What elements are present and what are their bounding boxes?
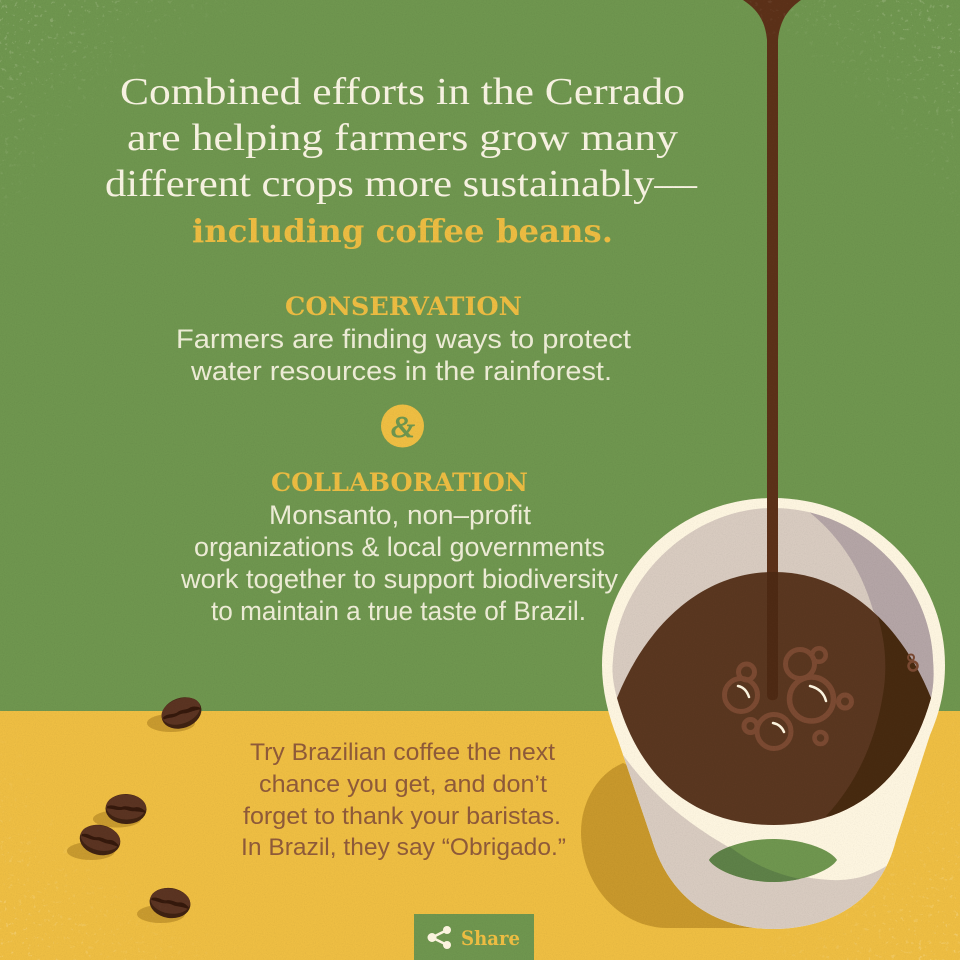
share button: Share bbox=[461, 926, 520, 950]
closing message bbox=[241, 739, 566, 861]
cup shadow on table bbox=[581, 763, 762, 928]
collaboration block: to maintain a true taste of Brazil. bbox=[211, 596, 586, 626]
closing message: forget to thank your baristas. bbox=[243, 803, 561, 830]
background: green wall bbox=[0, 0, 960, 711]
title: are helping farmers grow many bbox=[127, 117, 678, 159]
conservation block: Farmers are finding ways to protect bbox=[176, 324, 632, 354]
stream shading over coffee bbox=[767, 572, 778, 700]
conservation block: CONSERVATION bbox=[285, 292, 522, 321]
collaboration block: organizations & local governments bbox=[194, 532, 605, 562]
collaboration block: COLLABORATION bbox=[271, 468, 528, 497]
coffee surface bbox=[617, 572, 931, 825]
cup inner shadow bbox=[810, 512, 934, 702]
coffee beans bbox=[67, 692, 206, 923]
collaboration block: Monsanto, non–profit bbox=[269, 500, 532, 530]
background: yellow table bbox=[0, 711, 960, 960]
bubble highlights bbox=[738, 686, 826, 732]
title bbox=[105, 71, 698, 250]
ampersand badge: & bbox=[390, 409, 415, 444]
share button bbox=[414, 914, 534, 960]
title: Combined efforts in the Cerrado bbox=[120, 71, 685, 113]
coffee bubbles bbox=[724, 648, 918, 748]
ampersand badge bbox=[381, 404, 424, 448]
coffee stream bbox=[743, 0, 801, 700]
cup inner wall bbox=[612, 508, 934, 825]
green saucer reflection bbox=[709, 839, 837, 882]
closing message: In Brazil, they say “Obrigado.” bbox=[241, 834, 566, 861]
icon: share bbox=[428, 926, 451, 949]
coffee shadow bbox=[826, 616, 931, 816]
cup body and rim bbox=[602, 498, 945, 929]
collaboration block: work together to support biodiversity bbox=[180, 564, 618, 594]
conservation block bbox=[176, 292, 632, 386]
cup outer shaded side bbox=[623, 755, 887, 929]
closing message: chance you get, and don’t bbox=[259, 771, 547, 798]
title: different crops more sustainably— bbox=[105, 163, 698, 205]
closing message: Try Brazilian coffee the next bbox=[250, 739, 555, 766]
conservation block: water resources in the rainforest. bbox=[190, 356, 612, 386]
collaboration block bbox=[180, 468, 618, 626]
coffee cup bbox=[600, 498, 945, 940]
title: including coffee beans. bbox=[192, 212, 613, 250]
